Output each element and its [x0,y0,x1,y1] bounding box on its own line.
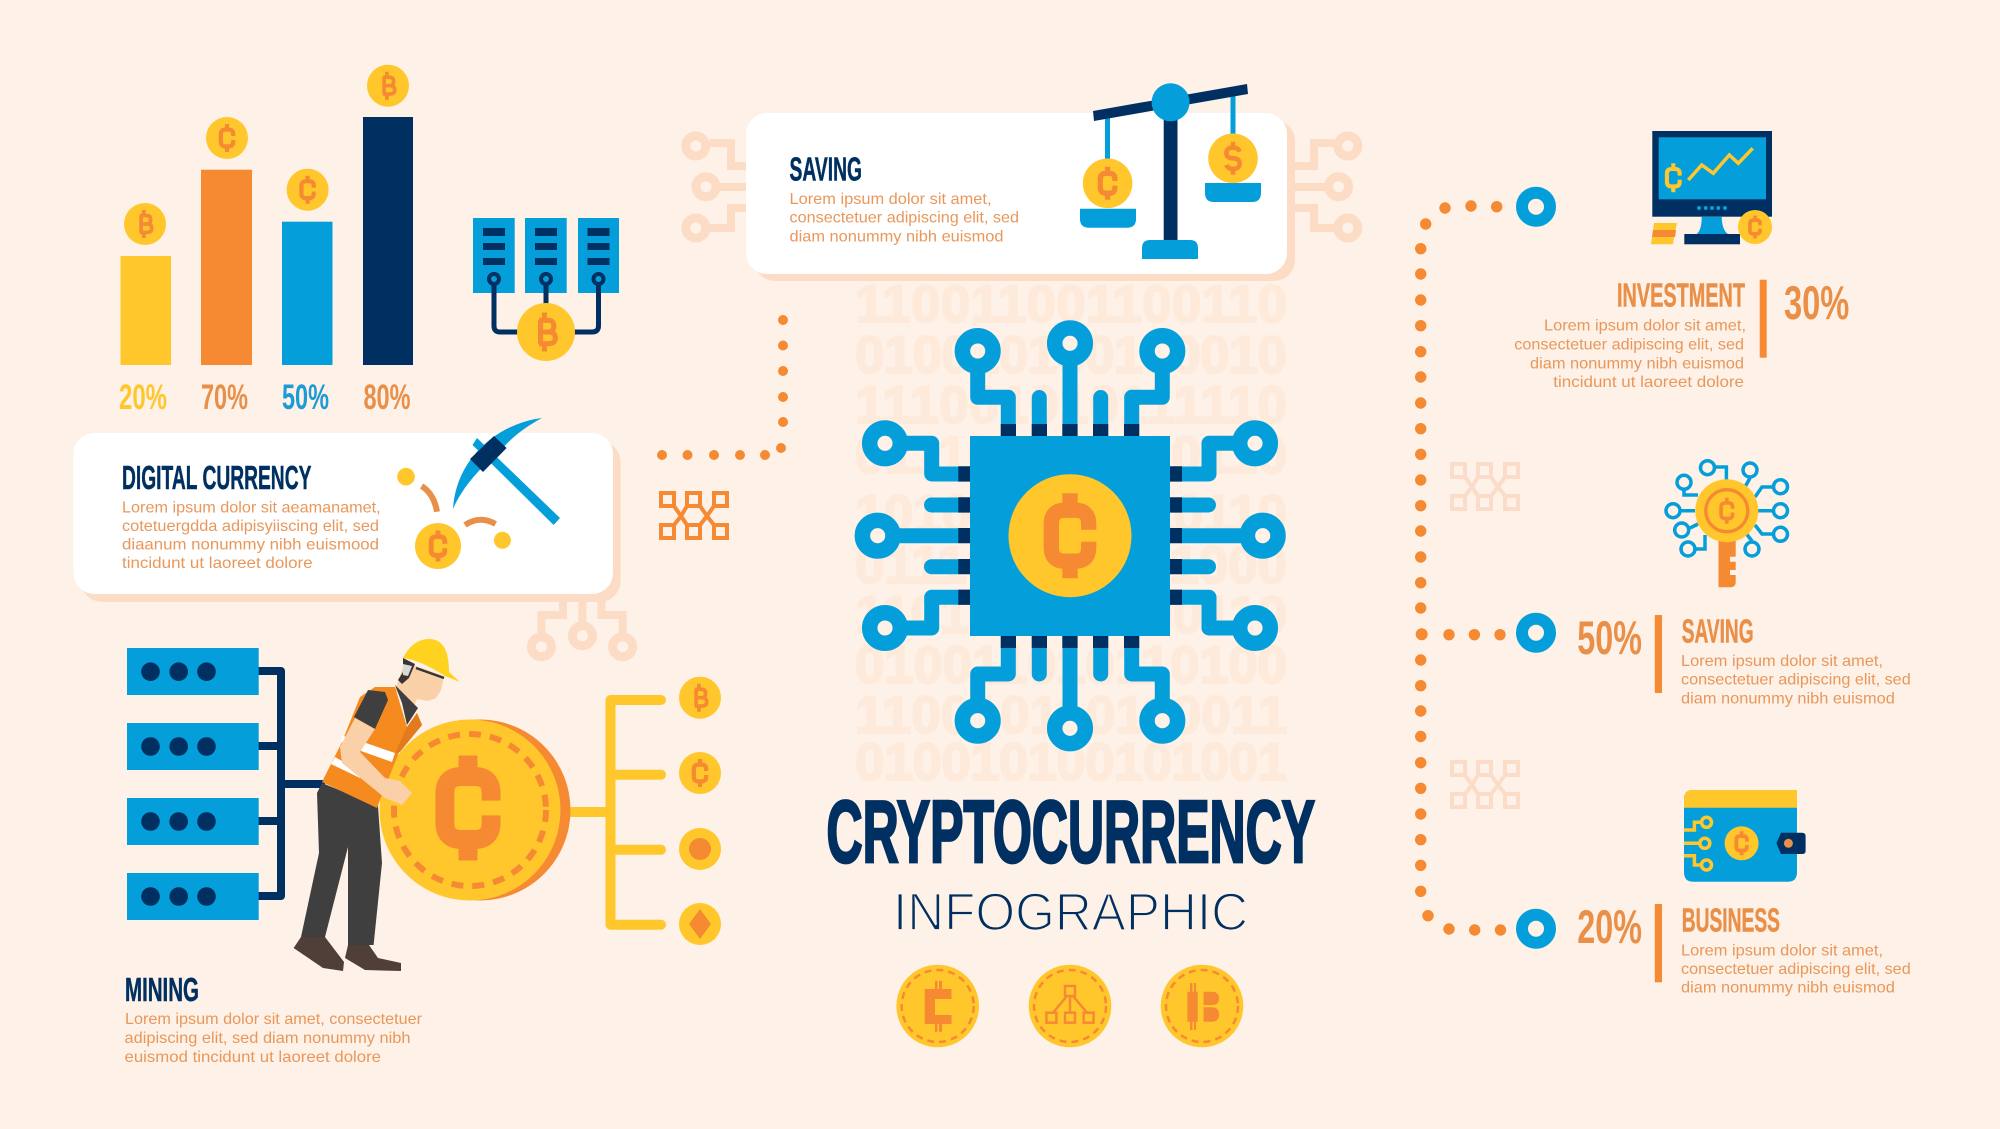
body text: business: diam nonummy nibh euismod [1681,980,1895,997]
hair [398,658,415,684]
coin above bar 20% [124,203,166,245]
connector lines [258,671,325,896]
coin: pixel C [896,965,979,1047]
timeline ring nodes [1522,193,1550,943]
bar labels: 80% [364,378,410,417]
bar 50% [282,222,332,365]
sleeve [354,690,388,729]
bar chart: coin percentages [119,65,413,417]
panel: saving [746,83,1295,281]
bar 80% [363,117,413,365]
panel: digital currency [73,418,621,602]
binary digit background: 110100101000110 [855,586,1287,645]
miner figure [294,639,460,971]
divider bar [1655,615,1662,693]
decorative circuit left of saving card [686,136,750,238]
body text: digital currency: cotetuergdda adipisyiiscing elit, sed [122,518,379,535]
binary digit background: 111001010111110 [855,376,1287,435]
body text: business [1681,942,1911,997]
coin: dot [679,828,721,870]
body text: investment: diam nonummy nibh euismod [1530,355,1744,372]
title: cryptocurrency: CRYPTOCURRENCY [826,782,1315,881]
body text: mining: euismod tincidunt ut laoreet dolore [124,1049,381,1066]
body text: saving [1681,653,1911,707]
percent: 30%: 30% [1784,276,1849,329]
divider bar [1655,904,1662,982]
dotted connector: saving card to digital currency card [657,315,788,460]
icon: balance scale [1080,83,1261,259]
server block 3 [127,798,259,845]
heading: saving: SAVING [790,151,862,188]
body text: saving: Lorem ipsum dolor sit amet, [790,191,992,208]
chip wires [885,350,1255,720]
dotted timeline right [1415,200,1506,936]
icon: orange network chip pattern [661,493,727,538]
decorative network pattern 1 [1452,464,1518,509]
binary digit background: 110011001100110 [855,275,1287,334]
decorative network pattern 2 [1452,762,1518,807]
neck and face [395,662,444,708]
coin: network [1029,965,1111,1047]
coin: cedi [679,752,721,794]
icon: server blocks with bitcoin [473,218,619,361]
reflective stripes [331,735,395,778]
coin list [679,677,721,945]
body text: saving [790,191,1019,245]
body text: saving: consectetuer adipiscing elit, sed [1681,672,1911,689]
body text: investment [1514,318,1746,391]
body text: mining [124,1011,423,1066]
server rack connected to miner [127,648,325,920]
body text: investment: Lorem ipsum dolor sit amet, [1544,318,1746,335]
heading: business: BUSINESS [1682,902,1780,939]
body text: saving: diam nonummy nibh euismod [1681,690,1895,707]
block: business [1577,900,1911,997]
decorative circuit right of saving card [1290,136,1358,238]
binary digit background: 011101001101000 [855,536,1287,595]
arm [340,718,412,805]
chip body [970,436,1170,636]
body text: investment: tincidunt ut laoreet dolore [1553,374,1744,391]
glasses [416,668,444,678]
bar 70% [201,170,252,365]
block: saving right [1577,611,1911,707]
subtitle: infographic: INFOGRAPHIC [893,883,1248,942]
body text: saving: diam nonummy nibh euismod [790,228,1004,245]
binary digit background: 011100110100110 [855,426,1287,485]
vest [322,687,422,808]
binary digit background [855,275,1287,792]
heading: investment: INVESTMENT [1617,277,1745,314]
bar labels: 50% [282,378,329,417]
body text: business: Lorem ipsum dolor sit amet, [1681,942,1883,959]
percent: 50%: 50% [1577,611,1642,664]
bar labels: 70% [201,378,248,417]
coin: block B [1161,965,1243,1047]
collar [395,685,418,725]
body text: saving: Lorem ipsum dolor sit amet, [1681,653,1883,670]
binary digit background: 010010100100010 [855,326,1287,385]
divider bar [1760,280,1767,358]
boots [294,937,401,971]
bar 20% [120,256,171,365]
body text: mining: adipiscing elit, sed diam nonummy nibh [124,1030,410,1047]
body text: digital currency: diaanum nonummy nibh euismood [122,537,379,554]
body text: digital currency: Lorem ipsum dolor sit aeamanamet, [122,499,381,516]
coin: bitcoin [679,677,721,719]
chip pins [958,424,1182,648]
coin row under title [896,965,1243,1047]
server block 4 [127,873,259,920]
coin above bar 70% [206,117,248,159]
icon: pickaxe mining coin [397,418,560,569]
decorative circuit under digital currency card [531,596,633,657]
yellow branch connector to coin list [570,700,661,925]
coin above bar 50% [287,169,329,211]
helmet [403,639,460,682]
body text: mining: Lorem ipsum dolor sit amet, consectetuer [125,1011,423,1028]
central chip icon [862,328,1278,744]
server block 1 [127,648,259,695]
icon: monitor with chart [1651,131,1772,244]
block: investment [1514,276,1849,391]
vest shaded side [395,713,422,753]
percent: 20%: 20% [1577,900,1642,953]
heading: saving: SAVING [1682,612,1754,649]
body text: saving: consectetuer adipiscing elit, sed [790,210,1019,227]
binary digit background: 101001010010110 [855,485,1287,544]
coin above bar 80% [367,65,409,107]
bar labels [119,378,410,417]
server block 2 [127,723,259,770]
body text: business: consectetuer adipiscing elit, sed [1681,961,1911,978]
body text: digital currency [122,499,381,572]
chip coin [1008,474,1132,597]
heading: mining: MINING [125,971,199,1008]
binary digit background: 010011010110100 [855,636,1287,695]
heading: digital currency: DIGITAL CURRENCY [122,459,311,496]
icon: crypto wallet [1684,790,1806,882]
chip ring terminals [862,328,1278,744]
big coin [380,720,570,900]
body text: digital currency: tincidunt ut laoreet dolore [122,555,313,572]
bar labels: 20% [119,378,167,417]
coin: diamond [679,903,721,945]
binary digit background: 010010100101001 [855,733,1287,792]
icon: circuit key [1666,461,1788,587]
trousers [301,783,382,945]
binary digit background: 110010110110011 [855,686,1287,745]
body text: investment: consectetuer adipiscing elit, sed [1514,336,1744,353]
